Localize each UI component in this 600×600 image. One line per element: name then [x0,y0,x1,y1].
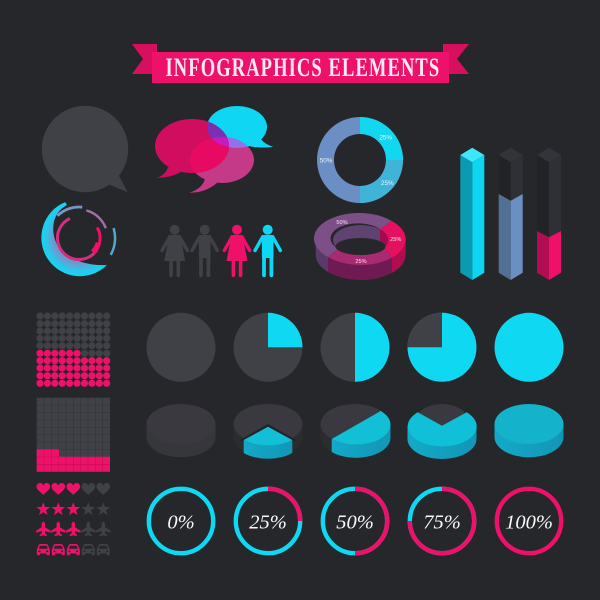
icon: pink woman [224,225,250,275]
icon: grey man [192,225,217,275]
icons: hearts rating [36,483,110,495]
icon: grey speech bubble [42,106,128,192]
chart: 3D pie 75% [408,404,477,459]
chart: 3D donut: 25% [390,237,401,243]
chart: flat pie 50% [320,313,390,382]
title banner [132,44,469,83]
ring gauge 0%: 0% [167,512,195,534]
chart: 3D pie 50% [320,404,391,458]
ring gauge 100% [497,489,561,553]
icon: overlapping chat bubbles [155,106,273,193]
chart: square grid [37,398,110,472]
icon: cyan man [255,225,280,275]
chart: 3D donut: 50% [336,220,348,226]
chart: flat pie 100% [494,313,564,382]
ring gauge 75% [410,489,474,553]
icons: planes rating [36,522,111,536]
icons: people [162,225,280,275]
chart: 3D donut: 25% [355,259,367,265]
chart: flat donut [320,126,394,194]
ring gauge 100%: 100% [505,512,553,534]
chart: flat donut: 50% [320,158,333,164]
ring gauge 50%: 50% [336,512,374,534]
chart: dot grid [40,316,108,383]
title: INFOGRAPHICS ELEMENTS [166,53,439,82]
chart: 3D pie 25% [234,404,302,459]
ring gauge 25%: 25% [249,512,287,534]
chart: isometric bar blue [499,148,523,280]
chart: flat donut: 25% [381,180,394,187]
chart: 3D pie 0% [146,404,216,457]
chart: isometric bar pink [537,148,561,280]
chart: flat pie 75% [408,313,476,382]
ring gauge 0% [149,489,213,553]
icons: cars rating [37,544,110,555]
ring gauge 25% [236,489,300,553]
chart: flat pie 0% [146,313,216,382]
ring gauge 50% [323,489,387,553]
chart: 3D donut [314,213,406,280]
chart: radial arcs [34,193,124,283]
chart: flat pie 25% [234,313,302,382]
icons: stars rating [36,502,110,515]
ring gauge 75%: 75% [423,512,461,534]
chart: isometric bar cyan [460,148,484,280]
chart: flat donut: 25% [379,134,392,142]
icon: grey woman [162,225,187,275]
chart: 3D pie 100% [494,404,564,457]
